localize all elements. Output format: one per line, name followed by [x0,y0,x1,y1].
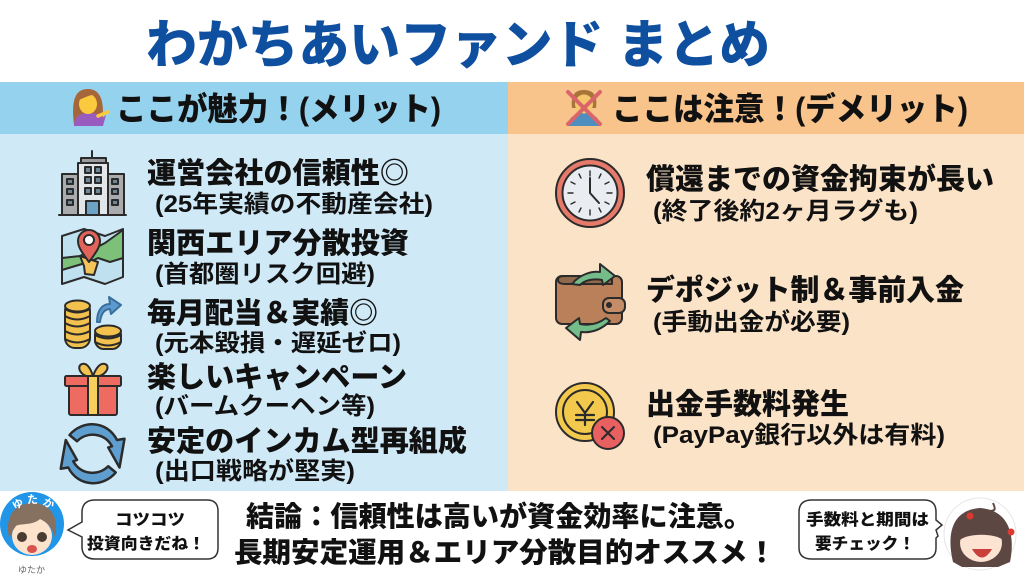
item text: Kansai: 関西エリア分散投資 [147,227,409,260]
item: deposit [556,264,964,340]
icon: woman tipping hand [73,89,108,126]
title: わかちあいファンド まとめ [146,17,770,75]
item: map [62,227,409,288]
item: withdrawal fee: (PayPay銀行以外は有料) [653,422,945,449]
icon: cycle arrows [61,424,124,483]
item text: income restructure: 安定のインカム型再組成 [147,424,467,458]
item text: campaign: 楽しいキャンペーン [147,361,407,394]
item: dividends [65,297,401,357]
speech bubble: left: 投資向きだね！ [87,534,205,553]
icon: wallet with arrows [556,264,625,340]
item: lock-up period [556,159,994,227]
item: income restructure [61,424,467,485]
item text: deposit: デポジット制＆事前入金 [646,273,964,307]
header text: merits: ここが魅力！(メリット) [116,91,441,127]
item: map: (首都圏リスク回避) [155,261,375,288]
speech bubble: left: コツコツ [115,512,185,529]
speech bubble: right: 手数料と期間は [806,510,929,529]
conclusion text [234,500,776,568]
panel header: demerits [508,82,1024,134]
icon: coins with arrow [65,297,121,349]
icon: person crossed out [568,90,600,126]
icon: yen coin with x badge [556,383,624,449]
item: deposit: (手動出金が必要) [653,308,850,336]
item text: trust: 運営会社の信頼性◎ [147,157,409,190]
icon: map with pin [62,229,123,284]
character: Yutaka: ゆ [10,496,26,513]
character: Yutaka [0,492,64,575]
panel: merits [0,82,508,491]
item: building: (25年実績の不動産会社) [155,191,433,218]
character: Yutaka: た [27,493,38,506]
item text: monthly dividends: 毎月配当＆実績◎ [147,297,378,330]
item: lock-up period: (終了後約2ヶ月ラグも) [653,197,918,225]
item: withdrawal fee [556,383,945,449]
item: dividends: (元本毀損・遅延ゼロ) [155,329,401,357]
item: income restructure: (出口戦略が堅実) [155,457,355,485]
item text: lock-up: 償還までの資金拘束が長い [646,162,994,196]
icon: gift box [65,364,121,415]
header text: demerits: ここは注意！(デメリット) [612,91,968,127]
character: Yutaka: ゆたか [18,565,45,575]
character: girl [944,498,1016,570]
item text: fee: 出金手数料発生 [646,388,849,421]
speech bubble: left [68,500,218,559]
conclusion text: 結論：信頼性は高いが資金効率に注意。 [246,500,752,532]
item: campaign: (バームクーヘン等) [155,393,375,420]
conclusion text: 長期安定運用＆エリア分散目的オススメ！ [234,537,776,568]
panel: demerits [508,82,1024,491]
speech bubble: right [799,500,942,559]
speech bubble: right: 要チェック！ [815,535,915,553]
icon: office building [59,151,126,215]
item: building [59,151,433,218]
panel header: merits [0,82,508,134]
character: Yutaka: か [41,495,57,512]
item: campaign [65,361,407,420]
icon: clock [556,159,624,227]
